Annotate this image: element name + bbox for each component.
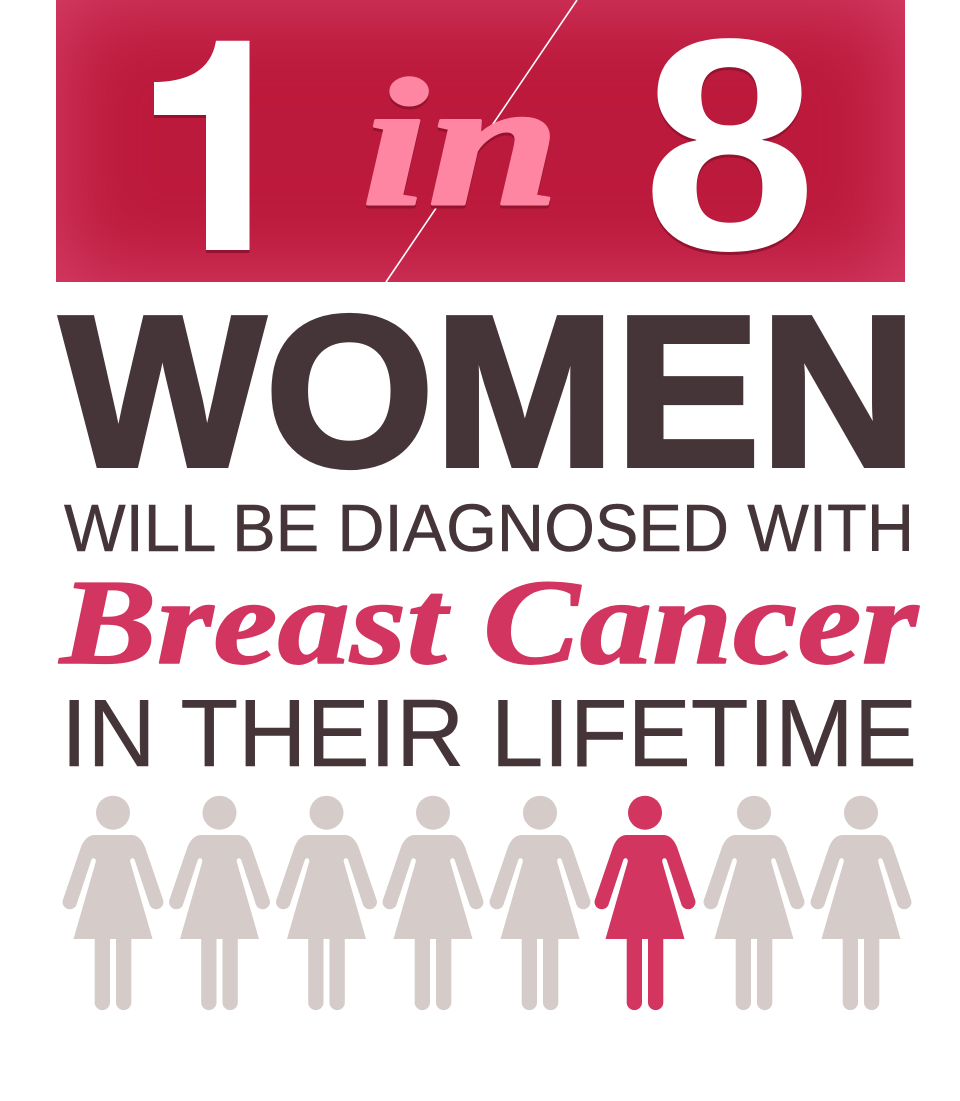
icon: woman 6, highlighted [595, 796, 695, 1010]
panel: red banner background [56, 0, 905, 282]
heading: WOMEN: WOMEN [60, 270, 917, 512]
icon: woman 4 [383, 796, 483, 1010]
diagonal divider line [386, 0, 577, 282]
icon: woman 7 [704, 796, 804, 1010]
icon row: eight women, one highlighted [63, 796, 911, 1010]
heading: Breast Cancer: Breast Cancer [58, 555, 920, 690]
text: in their lifetime: IN THEIR LIFETIME [61, 680, 917, 787]
icon: woman 3 [276, 796, 377, 1010]
icon: woman 5 [490, 796, 590, 1010]
icon: woman 1 [63, 796, 163, 1010]
text: will be diagnosed with: WILL BE DIAGNOSED WITH [64, 491, 914, 566]
icon: woman 8 [811, 796, 911, 1010]
word: in: in [362, 43, 560, 244]
icon: woman 2 [169, 796, 270, 1010]
